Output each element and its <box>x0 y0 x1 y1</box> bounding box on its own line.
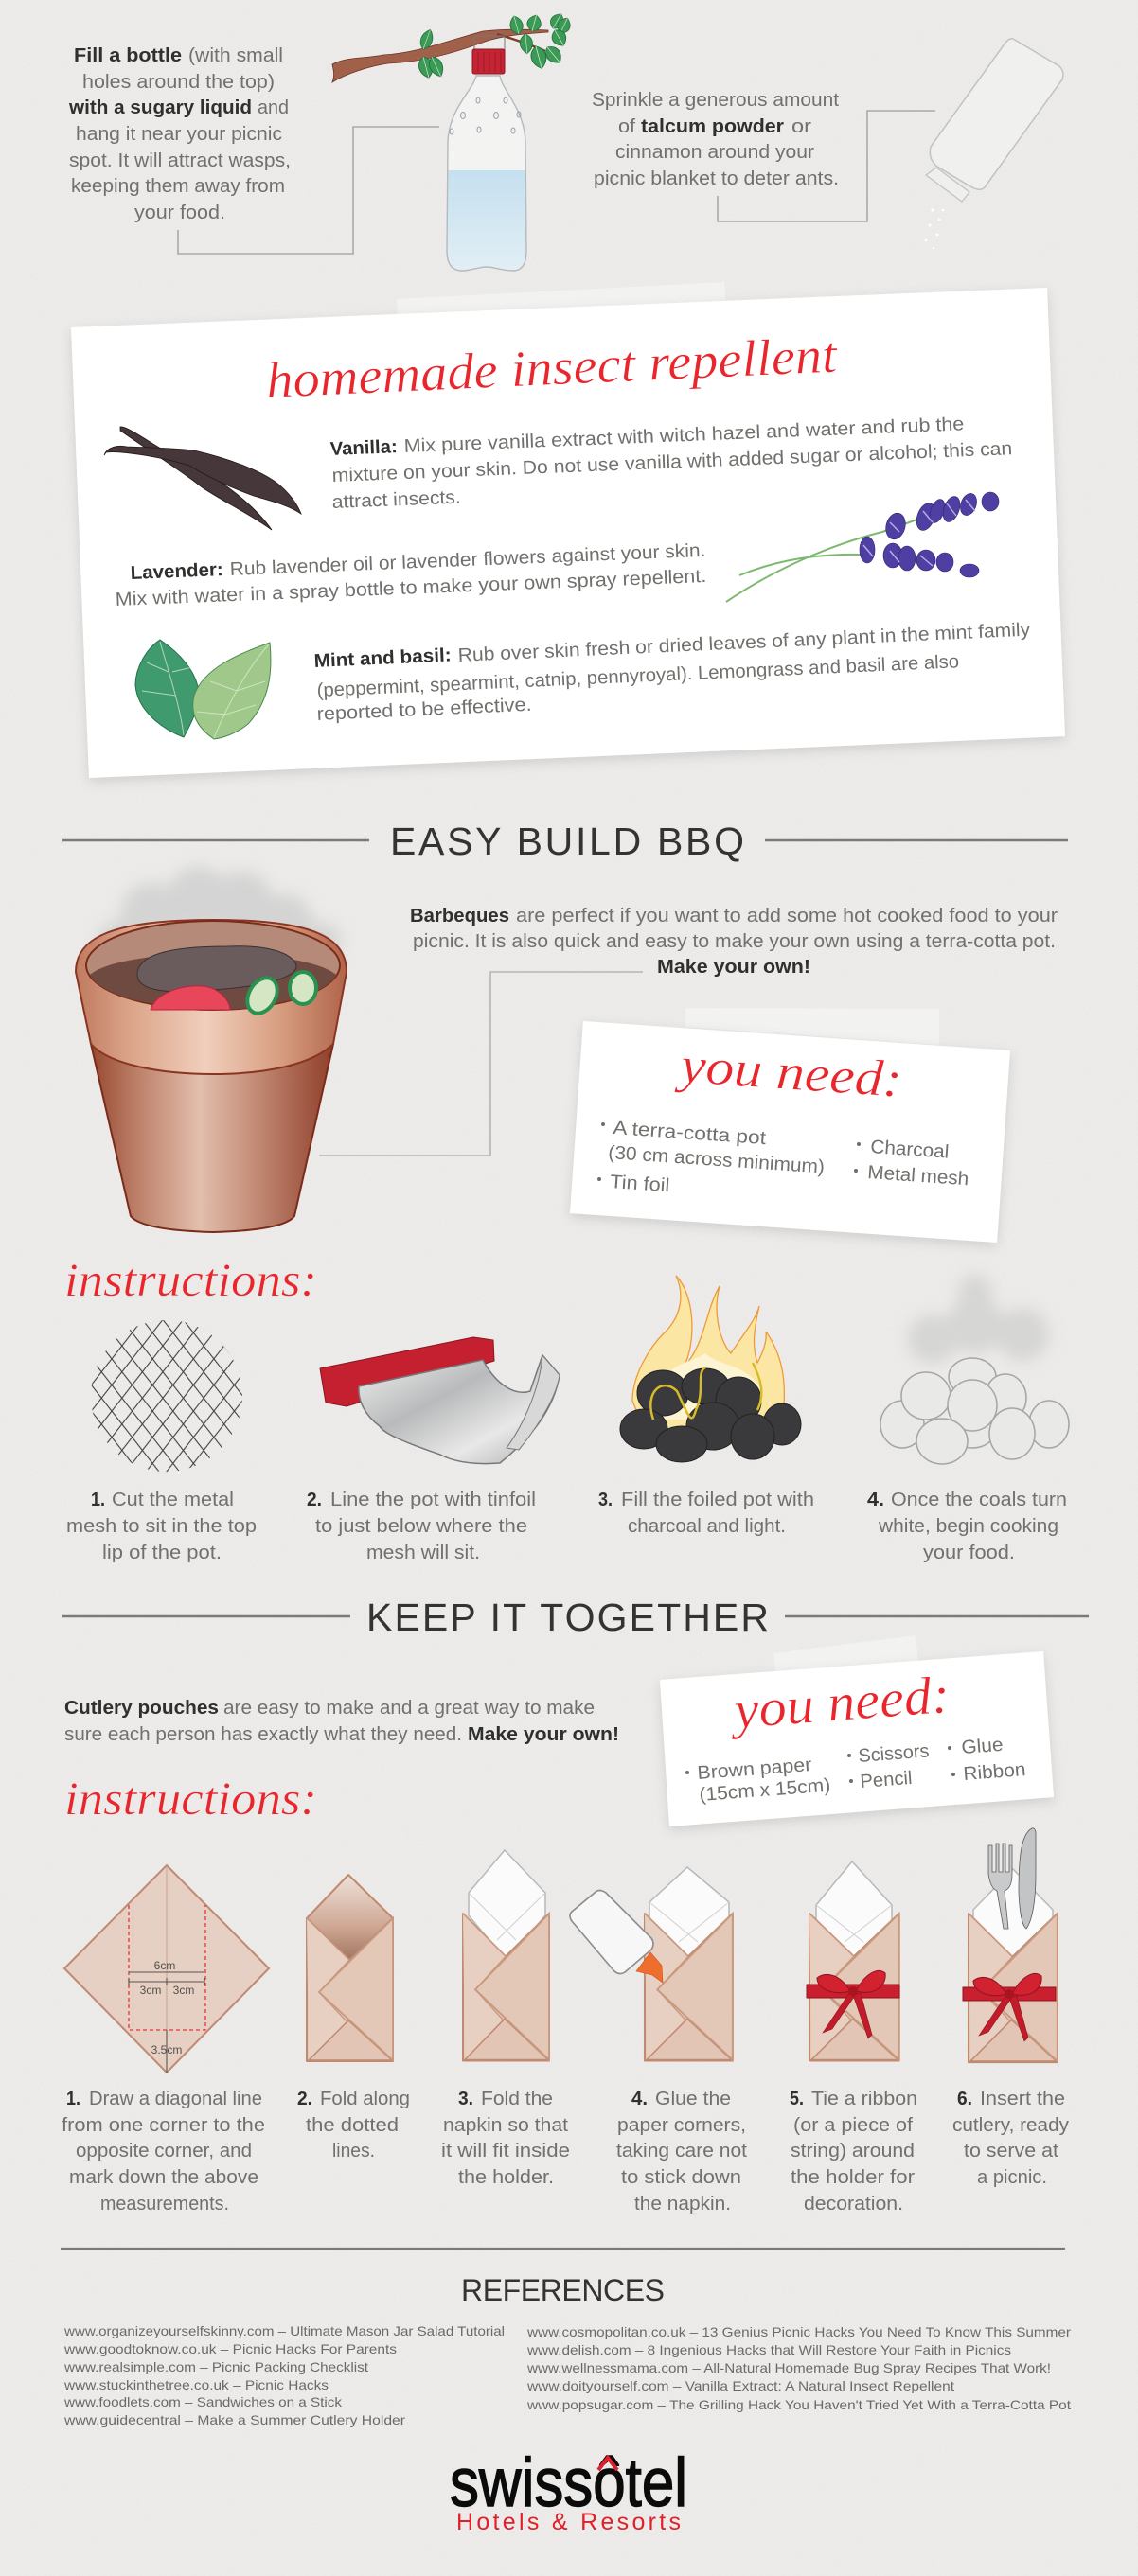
text: step 3: the holder. <box>458 2167 554 2188</box>
text: vanilla: Mix pure vanilla extract with witch hazel and water and rub the <box>403 414 965 457</box>
icon: paper diamond with measurements: 3cm <box>173 1984 194 1997</box>
step: draw diagonal <box>62 1865 269 2214</box>
heading: keep it together: KEEP IT TOGETHER <box>366 1596 769 1639</box>
card background <box>570 1021 1010 1243</box>
icon: plastic bottle <box>445 36 530 274</box>
text: step 5: 5. <box>790 2089 804 2109</box>
text: step 2: Line the pot with tinfoil <box>330 1490 536 1510</box>
list of materials: Glue <box>961 1735 1004 1758</box>
text: step 5: (or a piece of <box>793 2115 913 2136</box>
text: fill a bottle: keeping them away from <box>71 176 285 197</box>
text: sprinkle talcum <box>592 90 839 189</box>
text: step 2: 2. <box>307 1490 322 1510</box>
references list: right column: www.delish.com – 8 Ingenious Hacks that Will Restore Your Faith in Picnics <box>526 2342 1011 2357</box>
text: step 1: Cut the metal <box>112 1490 234 1510</box>
text: step 6: 6. <box>957 2089 972 2109</box>
panel: wasp bottle tip <box>68 10 573 274</box>
text: step 6: Insert the <box>980 2089 1065 2109</box>
text: mint and basil: reported to be effective. <box>316 695 532 725</box>
panel: you need card, cutlery <box>660 1635 1054 1826</box>
step: white coals <box>867 1275 1069 1563</box>
text: sprinkle talcum: picnic blanket to deter ants. <box>594 168 839 189</box>
text: mint and basil: Mint and basil: <box>313 644 452 672</box>
text: step 1: 1. <box>91 1490 105 1510</box>
panel: talcum powder tip <box>592 39 1063 249</box>
list of materials: Metal mesh <box>867 1162 969 1190</box>
text: step 4: Glue the <box>655 2089 731 2109</box>
references list: left column: www.realsimple.com – Picnic Packing Checklist <box>63 2359 368 2374</box>
text: step 3: 3. <box>598 1490 613 1510</box>
references list: left column <box>63 2323 505 2427</box>
text: fill a bottle: with a sugary liquid <box>68 97 252 118</box>
text: lavender: Mix with water in a spray bottle to make your own spray repellent. <box>115 566 707 610</box>
text: sprinkle talcum: talcum powder <box>641 116 784 137</box>
references list: left column: www.stuckinthetree.co.uk – Picnic Hacks <box>63 2377 329 2392</box>
text: fill a bottle: your food. <box>134 203 225 223</box>
text: step 3: charcoal and light. <box>628 1516 786 1537</box>
step: tin foil <box>307 1337 560 1563</box>
pot body <box>91 1044 333 1232</box>
text: step 1: 1. <box>66 2089 80 2109</box>
heading: instructions, bbq: instructions: <box>64 1253 317 1306</box>
text: step 6: cutlery, ready <box>952 2115 1069 2136</box>
list of materials: (30 cm across minimum) <box>608 1142 826 1178</box>
text: step 2: lines. <box>332 2141 375 2161</box>
connector line <box>718 111 935 221</box>
text: lavender: Rub lavender oil or lavender flowers against your skin. <box>229 540 706 580</box>
references list: right column <box>526 2324 1071 2412</box>
icon: paper diamond with measurements: 3cm <box>140 1984 161 1997</box>
tape <box>773 1635 918 1672</box>
references list: left column: www.organizeyourselfskinny.com – Ultimate Mason Jar Salad Tutorial <box>63 2323 505 2338</box>
list of materials: (15cm x 15cm) <box>699 1775 831 1806</box>
text: step 6: a picnic. <box>977 2167 1047 2188</box>
text: fill a bottle: spot. It will attract wasps, <box>69 150 291 171</box>
text: vanilla: attract insects. <box>331 487 461 513</box>
list of materials: Tin foil <box>610 1172 670 1196</box>
text: step 1: Draw a diagonal line <box>89 2089 262 2109</box>
step: metal mesh <box>66 1315 257 1563</box>
icon: paper diamond with measurements <box>64 1865 269 2073</box>
illustration: terracotta pot barbecue <box>76 867 347 1232</box>
icon: paper diamond with measurements: 6cm <box>154 1959 175 1972</box>
text: step 1: opposite corner, and <box>76 2141 252 2161</box>
text: step 1 <box>66 1490 257 1563</box>
text: step 5: the holder for <box>791 2167 915 2188</box>
text: step 1: lip of the pot. <box>102 1543 222 1563</box>
icon: vanilla pods <box>104 427 301 530</box>
food on grill <box>137 946 316 1018</box>
references list: right column: www.cosmopolitan.co.uk – 13 Genius Picnic Hacks You Need To Know This Summer <box>526 2324 1071 2339</box>
text: step 1: mesh to sit in the top <box>66 1516 257 1537</box>
text: step 2: mesh will sit. <box>366 1543 480 1563</box>
icon: pouch with glue bottle <box>570 1867 733 2061</box>
text: step 4: taking care not <box>616 2141 747 2161</box>
icon: pouch fold <box>307 1875 393 2061</box>
text: sprinkle talcum: or <box>791 116 811 137</box>
text: step 4: to stick down <box>621 2167 741 2188</box>
icon: foil on red box <box>320 1337 560 1464</box>
text: step 4 <box>867 1490 1067 1563</box>
step: tie ribbon <box>790 1861 917 2214</box>
logo: swissotel: swissôtel <box>450 2445 687 2521</box>
pot interior <box>86 921 340 1015</box>
step: fold along dotted lines <box>297 1875 410 2161</box>
step: insert cutlery <box>952 1828 1069 2188</box>
tape <box>397 282 726 322</box>
references list: right column: www.popsugar.com – The Grilling Hack You Haven't Tried Yet With a Terra-Cotta Pot <box>526 2397 1071 2412</box>
text: step 4 <box>616 2089 747 2214</box>
text: step 3: napkin so that <box>443 2115 568 2136</box>
text: sprinkle talcum: of <box>618 116 635 137</box>
card background <box>71 288 1065 778</box>
references list: right column: www.doityourself.com – Vanilla Extract: A Natural Insect Repellent <box>526 2378 954 2393</box>
references list: left column: www.guidecentral – Make a Summer Cutlery Holder <box>63 2412 405 2427</box>
icon: mesh <box>85 1315 248 1476</box>
text: lavender: Lavender: <box>130 559 223 584</box>
pot rim <box>76 920 347 1074</box>
text: step 4: Once the coals turn <box>891 1490 1067 1510</box>
text: cutlery pouches intro <box>64 1698 619 1745</box>
text: fill a bottle: (with small <box>188 45 283 66</box>
divider and references heading: REFERENCES <box>461 2273 665 2307</box>
tape <box>685 1008 939 1045</box>
icon: smoking white coals <box>880 1275 1069 1464</box>
text: step 2 <box>307 1490 536 1563</box>
text: mint and basil: (peppermint, spearmint, catnip, pennyroyal). Lemongrass and basil are also <box>316 651 960 701</box>
text: step 4: your food. <box>923 1543 1015 1563</box>
step: glue corners <box>570 1867 747 2214</box>
list of materials: Brown paper <box>697 1755 812 1784</box>
text: step 4: paper corners, <box>617 2115 746 2136</box>
icon: pouch with napkin <box>463 1850 549 2061</box>
text: barbeques intro: Barbeques <box>410 906 509 926</box>
references list: right column: www.wellnessmama.com – All-Natural Homemade Bug Spray Recipes That Work! <box>526 2360 1051 2375</box>
text: step 5 <box>790 2089 917 2214</box>
text: step 5: string) around <box>791 2141 915 2161</box>
list of materials: A terra-cotta pot <box>613 1118 767 1149</box>
logo: swissotel: Hotels & Resorts <box>456 2509 681 2535</box>
text: cutlery pouches intro: are easy to make and a great way to make <box>223 1698 595 1719</box>
heading: homemade insect repellent: homemade insect repellent <box>265 326 840 409</box>
list of materials <box>685 1735 1026 1806</box>
text: step 5: Tie a ribbon <box>811 2089 917 2109</box>
text: barbeques intro <box>410 906 1058 978</box>
text: barbeques intro: are perfect if you want to add some hot cooked food to your <box>516 906 1058 926</box>
heading: instructions, cutlery: instructions: <box>64 1772 317 1825</box>
list of materials <box>597 1118 969 1196</box>
text: step 2: Fold along <box>320 2089 410 2109</box>
icon: pouch with cutlery and ribbon <box>963 1828 1058 2062</box>
text: sprinkle talcum: cinnamon around your <box>615 142 814 163</box>
text: step 2: 2. <box>297 2089 312 2109</box>
text: step 4: white, begin cooking <box>878 1516 1058 1537</box>
references list: left column: www.goodtoknow.co.uk – Picnic Hacks For Parents <box>63 2341 397 2356</box>
text: step 1: from one corner to the <box>62 2115 265 2136</box>
icon: paper diamond with measurements: 3.5cm <box>151 2043 182 2056</box>
text: step 2: the dotted <box>306 2115 399 2136</box>
text: vanilla: mixture on your skin. Do not use vanilla with added sugar or alcohol; this can <box>331 438 1013 486</box>
text: mint and basil <box>313 620 1031 725</box>
text: step 6 <box>952 2089 1069 2188</box>
smoke <box>98 867 341 962</box>
icon: burning coals <box>620 1276 801 1462</box>
list of materials: Scissors <box>858 1740 930 1767</box>
text: step 4: 4. <box>867 1490 884 1510</box>
step: fold napkin <box>441 1850 570 2188</box>
text: step 4: the napkin. <box>634 2194 731 2214</box>
text: step 3: 3. <box>458 2089 473 2109</box>
connector line <box>319 972 643 1156</box>
text: step 3 <box>598 1490 814 1537</box>
text: sprinkle talcum: Sprinkle a generous amount <box>592 90 839 111</box>
text: step 5: decoration. <box>804 2194 903 2214</box>
text: barbeques intro: picnic. It is also quick and easy to make your own using a terra-cotta pot. <box>413 931 1056 952</box>
text: step 3: Fill the foiled pot with <box>621 1490 814 1510</box>
heading: you need: you need: <box>674 1036 904 1108</box>
text: vanilla <box>329 414 1013 513</box>
text: step 3: Fold the <box>481 2089 553 2109</box>
references list: left column: www.foodlets.com – Sandwiches on a Stick <box>63 2394 343 2409</box>
text: step 1 <box>62 2089 265 2214</box>
text: step 4: 4. <box>631 2089 648 2109</box>
text: fill a bottle <box>68 45 291 223</box>
heading: you need: you need: <box>727 1666 951 1740</box>
icon: pouch with ribbon <box>807 1861 899 2061</box>
text: barbeques intro: Make your own! <box>657 957 810 978</box>
text: step 2 <box>297 2089 410 2161</box>
text: step 6: to serve at <box>964 2141 1058 2161</box>
text: lavender <box>115 540 707 610</box>
icon: mint and basil leaves <box>135 640 271 739</box>
text: cutlery pouches intro: sure each person has exactly what they need. <box>64 1724 462 1745</box>
text: mint and basil: Rub over skin fresh or dried leaves of any plant in the mint family <box>457 620 1031 666</box>
icon: talcum bottle <box>925 39 1063 249</box>
list of materials: Pencil <box>860 1768 913 1792</box>
text: step 2: to just below where the <box>315 1516 527 1537</box>
connector line <box>178 127 439 254</box>
text: step 1: measurements. <box>100 2194 229 2214</box>
text: step 3 <box>441 2089 570 2188</box>
text: fill a bottle: Fill a bottle <box>74 45 182 66</box>
heading: easy build bbq: EASY BUILD BBQ <box>390 820 744 863</box>
text: cutlery pouches intro: Make your own! <box>468 1724 619 1745</box>
text: vanilla: Vanilla: <box>329 436 398 460</box>
text: cutlery pouches intro: Cutlery pouches <box>64 1698 219 1719</box>
text: fill a bottle: and <box>258 97 289 118</box>
text: fill a bottle: holes around the top) <box>82 72 275 93</box>
step: charcoal and flames <box>598 1276 814 1537</box>
text: fill a bottle: hang it near your picnic <box>76 124 282 145</box>
text: step 1: mark down the above <box>69 2167 258 2188</box>
panel: homemade insect repellent card <box>71 282 1065 778</box>
list of materials: Charcoal <box>870 1137 950 1163</box>
card background <box>660 1651 1054 1826</box>
text: step 3: it will fit inside <box>441 2141 570 2161</box>
panel: you need card, bbq <box>570 1008 1010 1243</box>
icon: branch with leaves <box>332 10 573 82</box>
icon: lavender sprigs <box>726 491 999 602</box>
list of materials: Ribbon <box>963 1759 1026 1785</box>
